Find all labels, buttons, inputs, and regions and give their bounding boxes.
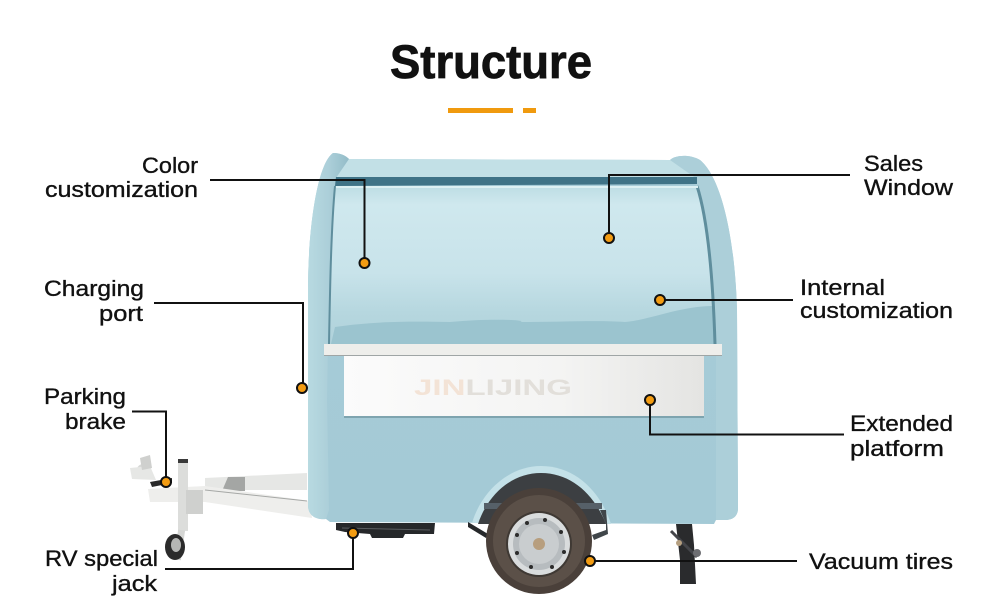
jockey wheel: [165, 459, 203, 560]
wheel: [486, 488, 592, 594]
counter bar: [324, 344, 722, 356]
callout: Sales Window: Sales: [864, 151, 923, 176]
title underline accent: [448, 108, 536, 113]
trailer body shell: [308, 153, 738, 524]
callout: Color customization: Color: [142, 153, 198, 178]
callout: Internal customization: customization: [800, 298, 953, 323]
window top shadow strip: [335, 177, 697, 186]
callout: Parking brake: brake: [65, 409, 126, 434]
callout: RV special jack: [45, 528, 358, 596]
extended platform panel: [344, 356, 704, 417]
callout: Parking brake: [44, 384, 171, 487]
callout: RV special jack: jack: [111, 571, 158, 596]
callout: Charging port: Charging: [44, 276, 144, 301]
callout: Sales Window: Window: [864, 175, 953, 200]
callout: Color customization: [45, 153, 370, 268]
left side pillar: [308, 153, 349, 519]
title: Structure: [390, 35, 592, 88]
callout: Charging port: [44, 276, 307, 393]
callout: RV special jack: RV special: [45, 546, 158, 571]
callout: Sales Window: [604, 151, 953, 243]
callout: Extended platform: platform: [850, 436, 944, 461]
illustration: food trailer: [130, 153, 738, 594]
scissor jack under body: [336, 523, 435, 538]
callout: Extended platform: [645, 395, 953, 461]
callout: Internal customization: [655, 275, 953, 323]
right side pillar: [670, 156, 738, 520]
window reflection: [331, 306, 715, 344]
callout: Vacuum tires: Vacuum tires: [809, 549, 953, 574]
wheel arch: [472, 466, 611, 524]
callout: Extended platform: Extended: [850, 411, 953, 436]
logo text: JIN LIJING: [414, 375, 572, 400]
window flap: [329, 186, 715, 344]
tow bar frame: [130, 455, 312, 518]
rear stabiliser jack: [671, 524, 701, 584]
callout: Color customization: customization: [45, 177, 198, 202]
callout: Vacuum tires: [585, 549, 953, 574]
callout: Internal customization: Internal: [800, 275, 885, 300]
callout: Charging port: port: [99, 301, 143, 326]
roof: [336, 159, 697, 179]
callout: Parking brake: Parking: [44, 384, 126, 409]
